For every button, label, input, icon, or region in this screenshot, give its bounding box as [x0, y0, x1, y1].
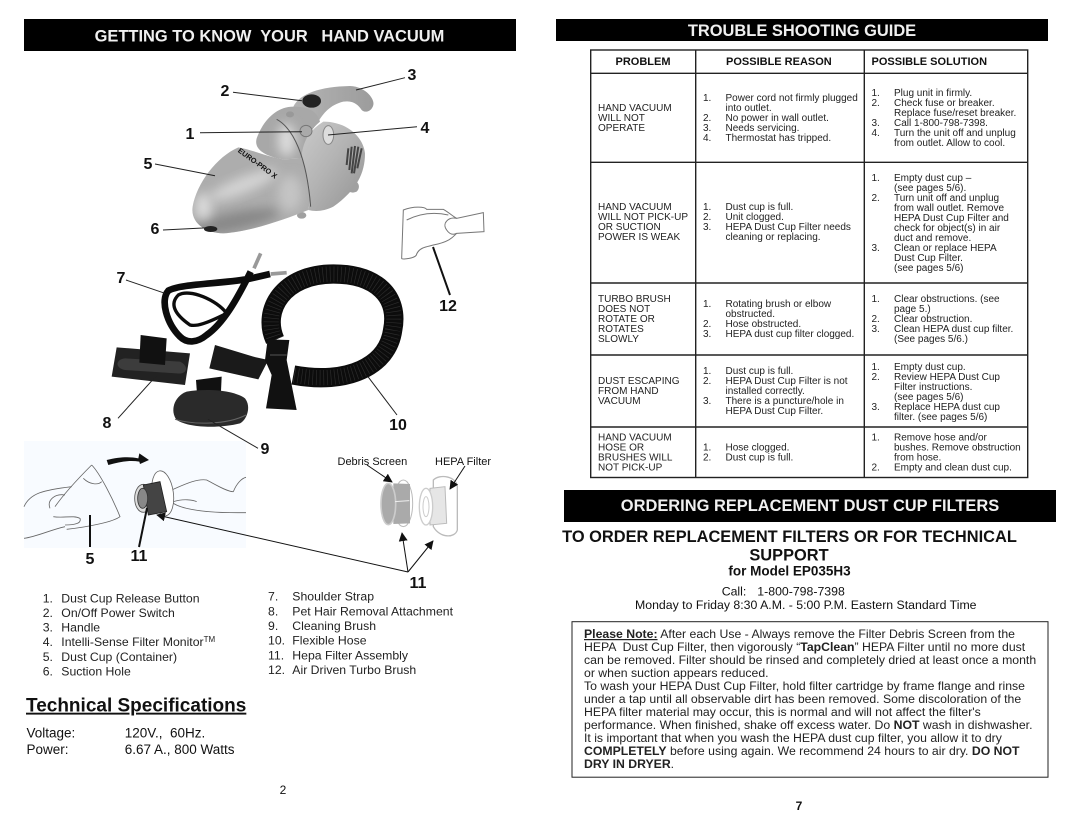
header: trouble shooting guide: TROUBLE SHOOTING GUIDE	[688, 22, 916, 40]
heading: technical specifications: Technical Specifications	[26, 696, 246, 717]
illustration: air driven turbo brush	[402, 207, 484, 259]
row: weak suction: (see pages 5/6).	[894, 183, 966, 194]
callout: please note: COMPLETELY before using again. We recommend 24 hours to air dry. DO NOT	[584, 744, 1020, 758]
parts list, left column: 3.	[43, 621, 53, 635]
callout: please note: To wash your HEPA Dust Cup Filter, hold filter cartridge by frame flange and rinse	[584, 679, 1025, 693]
callout: please note: or when suction appears reduced.	[584, 666, 769, 680]
part numbers and leader lines: 5	[144, 156, 153, 173]
technical specifications values	[26, 726, 235, 757]
parts list, left column: 6.	[43, 665, 53, 679]
row: weak suction: 2.	[872, 193, 880, 204]
callout: please note	[572, 622, 1048, 777]
row: will not operate: 3.	[703, 123, 711, 134]
row: turbo brush: Clear obstruction.	[894, 314, 972, 325]
illustration: pet hair removal attachment	[112, 335, 190, 385]
row: hose or brushes: HAND VACUUM	[598, 432, 672, 444]
parts list, right column: Shoulder Strap	[292, 590, 374, 604]
row: dust escaping: 2.	[872, 372, 880, 383]
row: will not operate: into outlet.	[726, 103, 772, 114]
row: weak suction: WILL NOT PICK-UP	[598, 212, 688, 223]
callout: please note: DRY IN DRYER.	[584, 757, 674, 771]
row: weak suction: 2.	[703, 212, 711, 223]
parts list, left column: 1.	[43, 592, 53, 606]
part numbers and leader lines: 12	[439, 298, 457, 315]
parts list, left column: Intelli-Sense Filter Monitor	[61, 635, 204, 649]
part numbers and leader lines: 1	[186, 126, 195, 143]
row: hose or brushes: HOSE OR	[598, 442, 644, 454]
row: weak suction	[598, 173, 1009, 274]
row: turbo brush: ROTATES	[598, 324, 644, 335]
row: hose or brushes: NOT PICK-UP	[598, 462, 663, 474]
row: will not operate: HAND VACUUM	[598, 103, 672, 114]
row: dust escaping: filter. (see pages 5/6)	[894, 412, 987, 423]
row: dust escaping: 3.	[703, 396, 711, 407]
page number 2: 2	[280, 783, 287, 797]
row: will not operate: 3.	[872, 118, 880, 129]
filter labels and arrows: Debris Screen	[338, 456, 407, 468]
row: weak suction: cleaning or replacing.	[726, 232, 821, 243]
row: turbo brush: 3.	[872, 324, 880, 335]
row: dust escaping: 1.	[872, 362, 880, 373]
filter labels and arrows: HEPA Filter	[435, 456, 491, 468]
row: weak suction: Dust cup is full.	[726, 202, 793, 213]
header: ordering replacement dust cup filters	[564, 490, 1056, 522]
row: weak suction: Turn unit off and unplug	[894, 193, 999, 204]
parts list, right column: Pet Hair Removal Attachment	[292, 604, 454, 618]
ordering heading: for Model EP035H3	[728, 564, 851, 579]
row: will not operate: 4.	[872, 128, 880, 139]
parts list, left column: Handle	[61, 621, 100, 635]
illustration: flexible hose	[209, 274, 394, 410]
header: trouble shooting guide	[556, 19, 1048, 41]
technical specifications values: 6.67 A., 800 Watts	[125, 742, 235, 757]
row: hose or brushes: Dust cup is full.	[726, 452, 793, 464]
parts list, left column: 5.	[43, 650, 53, 664]
filter labels and arrows: 11	[131, 548, 148, 565]
row: hose or brushes	[598, 432, 1021, 474]
row: dust escaping: Filter instructions.	[894, 382, 972, 393]
row: will not operate: Power cord not firmly plugged	[726, 93, 858, 104]
part numbers and leader lines	[103, 67, 457, 458]
ordering heading: TO ORDER REPLACEMENT FILTERS OR FOR TECHNICAL	[562, 528, 1017, 546]
parts list, right column: Flexible Hose	[292, 634, 367, 648]
row: weak suction: check for object(s) in air	[894, 223, 1001, 234]
callout: please note: performance. When finished, shake off excess water. Do NOT wash in dishwasher.	[584, 718, 1032, 732]
row: hose or brushes: Hose clogged.	[726, 442, 789, 454]
contact information: Call:	[722, 585, 746, 599]
row: hose or brushes: 2.	[703, 452, 711, 464]
parts list, left column	[43, 592, 215, 679]
row: will not operate: Plug unit in firmly.	[894, 88, 972, 99]
row: weak suction: 1.	[872, 173, 880, 184]
row: will not operate: Check fuse or breaker.	[894, 98, 995, 109]
row: hose or brushes: 1.	[703, 442, 711, 454]
row: dust escaping: Dust cup is full.	[726, 366, 793, 377]
row: dust escaping: VACUUM	[598, 396, 641, 407]
row: will not operate: Turn the unit off and unplug	[894, 128, 1016, 139]
row: weak suction: Clean or replace HEPA	[894, 243, 997, 254]
row: dust escaping	[598, 362, 1000, 423]
row: will not operate: OPERATE	[598, 123, 645, 134]
row: hose or brushes: 2.	[872, 462, 880, 474]
row: weak suction: HEPA Dust Cup Filter and	[894, 213, 1009, 224]
row: will not operate: 2.	[872, 98, 880, 109]
row: turbo brush: ROTATE OR	[598, 314, 655, 325]
row: turbo brush: SLOWLY	[598, 334, 639, 345]
row: turbo brush: 1.	[872, 294, 880, 305]
table header row: PROBLEM	[616, 56, 670, 68]
technical specifications values: 120V., 60Hz.	[125, 726, 205, 741]
row: turbo brush: 1.	[703, 299, 711, 310]
callout: please note: can be removed. Filter should be rinsed and completely dried at least once a month	[584, 653, 1036, 667]
row: dust escaping: There is a puncture/hole in	[726, 396, 844, 407]
row: will not operate: Thermostat has tripped.	[726, 133, 831, 144]
parts list, right column: 11.	[268, 648, 284, 662]
row: turbo brush	[598, 294, 1013, 345]
table header row: POSSIBLE SOLUTION	[872, 56, 987, 68]
row: hose or brushes: Remove hose and/or	[894, 432, 988, 444]
trouble shooting table	[591, 50, 1028, 478]
parts list, left column: 2.	[43, 606, 53, 620]
contact information: Monday to Friday 8:30 A.M. - 5:00 P.M. Eastern Standard Time	[635, 598, 977, 612]
row: hose or brushes: from hose.	[894, 452, 941, 464]
part numbers and leader lines: 10	[389, 417, 407, 434]
illustration: cleaning brush	[173, 377, 248, 427]
row: will not operate	[598, 88, 1016, 149]
parts list, right column: Cleaning Brush	[292, 619, 376, 633]
ordering heading	[562, 528, 1017, 579]
row: turbo brush: 2.	[872, 314, 880, 325]
parts list, left column: 4.	[43, 635, 53, 649]
part numbers and leader lines: 8	[103, 415, 112, 432]
row: will not operate: 1.	[703, 93, 711, 104]
row: turbo brush: 2.	[703, 319, 711, 330]
row: turbo brush: TURBO BRUSH	[598, 294, 671, 305]
row: dust escaping: DUST ESCAPING	[598, 376, 680, 387]
row: turbo brush: 3.	[703, 329, 711, 340]
part numbers and leader lines: 9	[261, 441, 270, 458]
parts list, left column: TM	[204, 635, 215, 644]
technical specifications values: Power:	[26, 742, 69, 757]
row: will not operate: from outlet. Allow to cool.	[894, 138, 1005, 149]
row: hose or brushes: bushes. Remove obstruction	[894, 442, 1021, 454]
row: dust escaping: installed correctly.	[726, 386, 805, 397]
row: dust escaping: HEPA Dust Cup Filter is not	[726, 376, 848, 387]
row: weak suction: OR SUCTION	[598, 222, 661, 233]
row: weak suction: 1.	[703, 202, 711, 213]
parts list, left column: Dust Cup (Container)	[61, 650, 177, 664]
row: dust escaping: Empty dust cup.	[894, 362, 966, 373]
callout: please note: under a tap until all observable dirt has been removed. Some discoloration of the	[584, 692, 1021, 706]
part numbers and leader lines: 3	[408, 67, 417, 84]
illustration: debris screen and HEPA filter parts	[381, 477, 457, 536]
callout: please note: HEPA Dust Cup Filter, then vigorously “TapClean” HEPA Filter until no more dust	[584, 640, 1026, 654]
row: dust escaping: Review HEPA Dust Cup	[894, 372, 1000, 383]
table header row: POSSIBLE REASON	[726, 56, 832, 68]
parts list, left column: Suction Hole	[61, 665, 131, 679]
row: will not operate: No power in wall outlet.	[726, 113, 829, 124]
row: turbo brush: Hose obstructed.	[726, 319, 801, 330]
illustration: hand vacuum body: EURO-PRO X	[236, 146, 279, 181]
part numbers and leader lines: 6	[151, 221, 160, 238]
row: weak suction: Unit clogged.	[726, 212, 784, 223]
callout: please note: It is important that when you wash the HEPA dust cup filter, you allow it to dry	[584, 731, 1003, 745]
row: hose or brushes: BRUSHES WILL	[598, 452, 673, 464]
parts list, right column: 8.	[268, 604, 278, 618]
illustration: shoulder strap	[165, 253, 287, 341]
row: weak suction: POWER IS WEAK	[598, 232, 681, 243]
parts list, right column: 9.	[268, 619, 278, 633]
row: turbo brush: Rotating brush or elbow	[726, 299, 832, 310]
parts list, right column: 10.	[268, 634, 285, 648]
row: dust escaping: FROM HAND	[598, 386, 659, 397]
row: weak suction: Empty dust cup –	[894, 173, 972, 184]
header: getting to know your hand vacuum	[24, 19, 516, 51]
page number 7: 7	[796, 799, 803, 813]
row: hose or brushes: Empty and clean dust cup.	[894, 462, 1012, 474]
parts list, right column: 7.	[268, 590, 278, 604]
row: turbo brush: obstructed.	[726, 309, 775, 320]
row: turbo brush: Clear obstructions. (see	[894, 294, 1000, 305]
row: weak suction: from wall outlet. Remove	[894, 203, 1004, 214]
row: weak suction: 3.	[703, 222, 711, 233]
row: hose or brushes: 1.	[872, 432, 880, 444]
header: getting to know your hand vacuum: GETTING TO KNOW YOUR HAND VACUUM	[95, 27, 444, 45]
callout: please note: Please Note: After each Use - Always remove the Filter Debris Screen from the	[584, 627, 1015, 641]
header: ordering replacement dust cup filters: ORDERING REPLACEMENT DUST CUP FILTERS	[621, 497, 999, 515]
ordering heading: SUPPORT	[749, 547, 829, 565]
illustration: removing the filter from the dust cup	[24, 441, 246, 548]
row: will not operate: Replace fuse/reset breaker.	[894, 108, 1016, 119]
row: will not operate: 1.	[872, 88, 880, 99]
row: turbo brush: (See pages 5/6.)	[894, 334, 968, 345]
row: turbo brush: Clean HEPA dust cup filter.	[894, 324, 1013, 335]
table header row	[616, 56, 987, 68]
row: dust escaping: 2.	[703, 376, 711, 387]
row: turbo brush: HEPA dust cup filter clogged.	[726, 329, 854, 340]
row: weak suction: (see pages 5/6)	[894, 263, 964, 274]
part numbers and leader lines: 2	[221, 83, 230, 100]
row: turbo brush: page 5.)	[894, 304, 931, 315]
parts list, left column: Dust Cup Release Button	[61, 592, 200, 606]
row: will not operate: 2.	[703, 113, 711, 124]
row: turbo brush: DOES NOT	[598, 304, 650, 315]
row: dust escaping: 1.	[703, 366, 711, 377]
contact information: 1-800-798-7398	[757, 585, 845, 599]
row: dust escaping: (see pages 5/6)	[894, 392, 964, 403]
part numbers and leader lines: 4	[421, 120, 430, 137]
parts list, left column: On/Off Power Switch	[61, 606, 175, 620]
row: weak suction: duct and remove.	[894, 233, 971, 244]
illustration: hand vacuum body	[186, 86, 374, 240]
part numbers and leader lines: 7	[117, 270, 126, 287]
row: weak suction: Dust Cup Filter.	[894, 253, 963, 264]
row: weak suction: HEPA Dust Cup Filter needs	[726, 222, 851, 233]
technical specifications values: Voltage:	[26, 726, 75, 741]
row: weak suction: 3.	[872, 243, 880, 254]
filter labels and arrows: 11	[410, 575, 427, 592]
row: will not operate: Needs servicing.	[726, 123, 799, 134]
row: dust escaping: Replace HEPA dust cup	[894, 402, 1000, 413]
row: will not operate: Call 1-800-798-7398.	[894, 118, 988, 129]
filter labels and arrows: 5	[86, 551, 95, 568]
row: weak suction: HAND VACUUM	[598, 202, 672, 213]
row: will not operate: WILL NOT	[598, 113, 645, 124]
filter labels and arrows	[86, 456, 491, 592]
parts list, right column: 12.	[268, 663, 285, 677]
contact information	[635, 585, 977, 612]
parts list, right column	[268, 590, 454, 677]
row: dust escaping: HEPA Dust Cup Filter.	[726, 406, 823, 417]
callout: please note: HEPA filter material may occur, this is normal and will not affect the filter's	[584, 705, 981, 719]
parts list, right column: Air Driven Turbo Brush	[292, 663, 416, 677]
parts list, right column: Hepa Filter Assembly	[292, 648, 409, 662]
row: will not operate: 4.	[703, 133, 711, 144]
row: dust escaping: 3.	[872, 402, 880, 413]
